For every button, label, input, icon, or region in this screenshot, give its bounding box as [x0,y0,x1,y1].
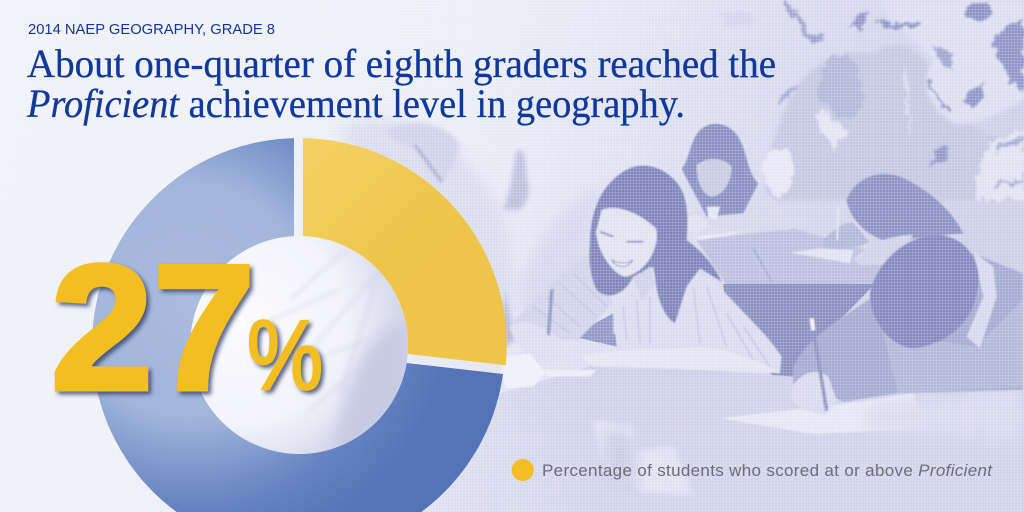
donut chart [92,138,507,512]
background photo: students at desks [335,0,1024,512]
blurred students at left [335,118,620,350]
legend text: Percentage of students who scored at or above Proficient [542,461,993,480]
face [596,208,657,277]
big number: 27%: 27 [51,228,255,427]
legend [512,459,993,481]
back table [693,228,900,285]
map on the wall [720,0,1024,200]
eyebrow label: 2014 NAEP GEOGRAPHY, GRADE 8 [28,22,275,38]
segment: 27 percent proficient [303,138,507,365]
title: Proficient achievement level in geography. [26,81,685,126]
arm and hand [580,347,780,373]
hair [589,166,722,323]
big number: 27%: % [247,300,323,410]
title: About one-quarter of eighth graders reached the [27,41,776,86]
main girl [500,166,782,388]
front table [393,363,1023,512]
legend marker [512,459,534,481]
title [26,41,776,126]
photo details, drawn in a 3x grid [393,124,1023,512]
donut centre showing faded photo [190,236,408,454]
right student girl [823,174,963,265]
dark gap under table [723,284,875,377]
front boy body [791,252,1023,415]
boy hair [870,235,978,348]
sweater [510,253,613,340]
back student girl [682,124,793,233]
segment: 73 percent remainder [92,138,503,512]
